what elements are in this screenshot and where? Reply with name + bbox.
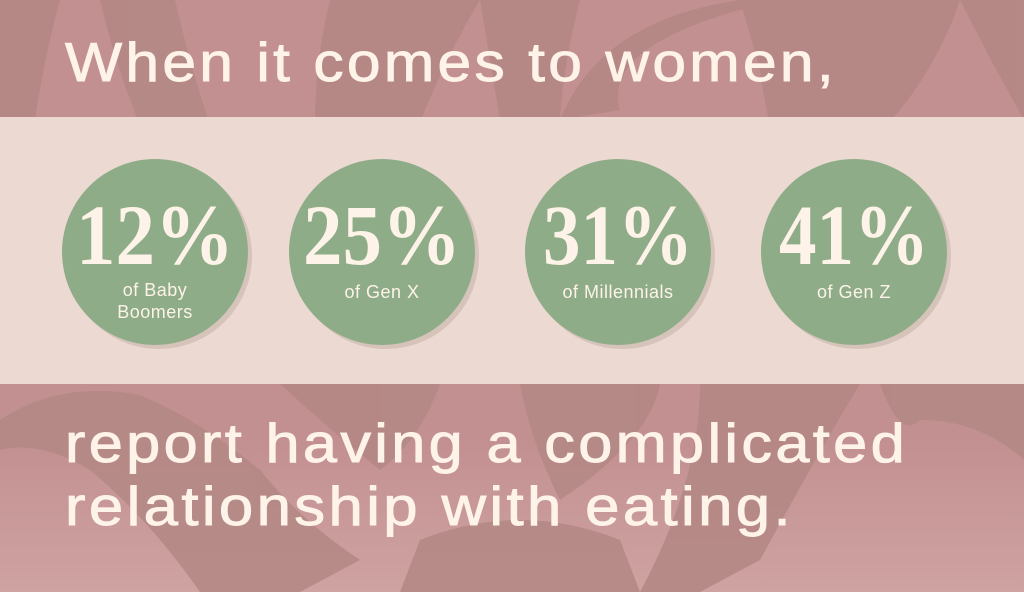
stat: gen z: of Gen Z — [817, 282, 891, 302]
stat: gen x: of Gen X — [344, 282, 420, 302]
stat: baby boomers: Boomers — [117, 302, 193, 322]
heading: top: When it comes to women, — [65, 31, 837, 93]
text: bottom statement: relationship with eating. — [65, 475, 794, 537]
text: bottom statement: report having a complicated — [65, 412, 908, 474]
stat: baby boomers: 12% — [76, 187, 234, 283]
stat: millennials — [525, 159, 715, 349]
text: bottom statement — [65, 412, 908, 537]
stat: millennials: 31% — [543, 187, 693, 283]
stat: gen z — [761, 159, 951, 349]
stat: millennials: of Millennials — [562, 282, 674, 302]
stat: gen x — [289, 159, 479, 349]
band: stats — [0, 117, 1024, 384]
stat: gen z: 41% — [779, 187, 929, 283]
stat: baby boomers: of Baby — [123, 280, 187, 300]
stat: gen x: 25% — [303, 187, 461, 283]
stat: baby boomers — [62, 159, 252, 349]
